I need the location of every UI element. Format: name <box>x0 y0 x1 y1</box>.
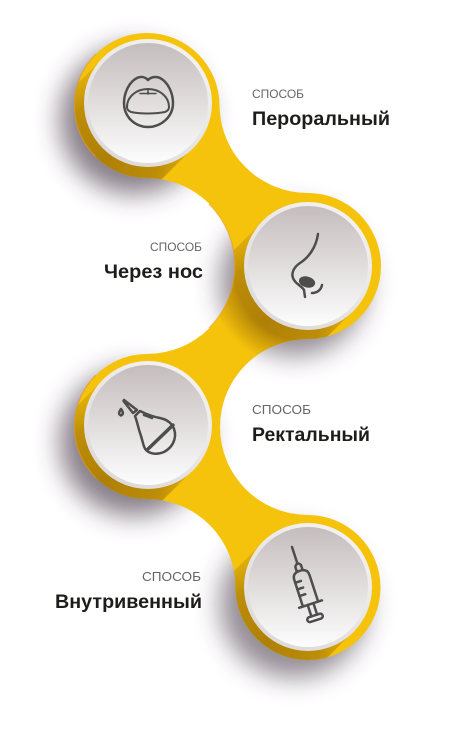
label: nasal <box>104 240 203 283</box>
label: intravenous <box>55 569 202 613</box>
long shadows on ribbon <box>74 40 372 660</box>
label: intravenous: СПОСОБ <box>142 569 201 584</box>
label: oral <box>252 87 390 130</box>
node 4: syringe <box>244 523 372 651</box>
label: nasal: Через нос <box>104 262 203 283</box>
node 3: enema bulb <box>84 361 212 489</box>
orange edges <box>74 54 235 478</box>
background shadows <box>60 46 368 678</box>
icon: nose <box>292 234 322 297</box>
node 2: nose <box>244 202 372 330</box>
label: nasal: СПОСОБ <box>150 240 202 254</box>
node 1: mouth <box>84 39 212 167</box>
yellow ribbon <box>74 33 381 660</box>
label: rectal: Ректальный <box>252 425 370 446</box>
label: oral: СПОСОБ <box>252 87 304 101</box>
label: rectal: СПОСОБ <box>252 402 311 417</box>
icon: enema bulb <box>119 400 175 454</box>
icon: syringe <box>281 543 327 624</box>
icon: mouth <box>124 77 173 127</box>
label: oral: Пероральный <box>252 109 390 130</box>
label: rectal <box>252 402 370 446</box>
label: intravenous: Внутривенный <box>55 592 202 613</box>
